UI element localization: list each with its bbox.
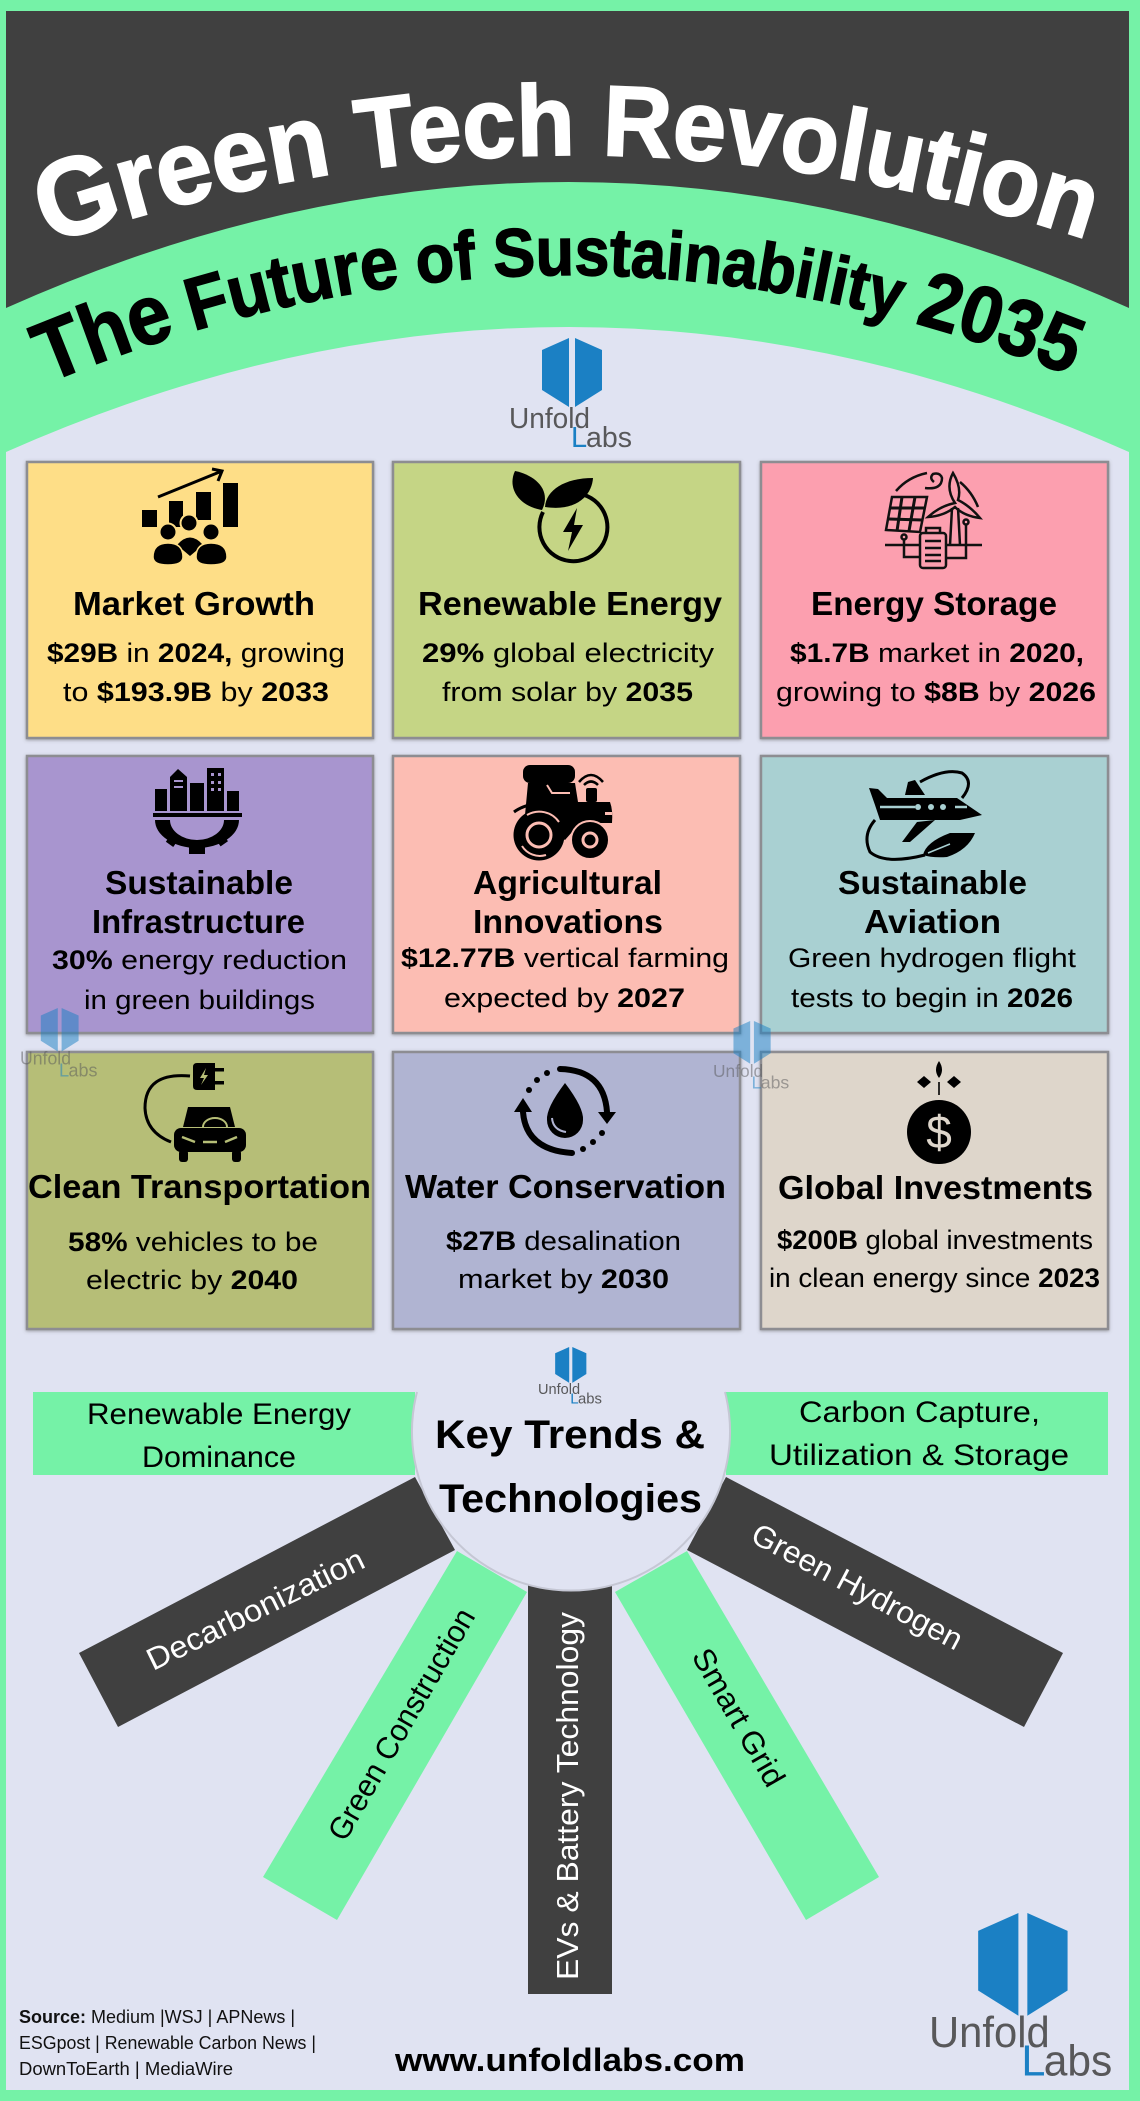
logo: top: Unfold: [509, 403, 590, 435]
source list: Source: Medium |WSJ | APNews |: [19, 2007, 295, 2027]
source list: [19, 2007, 316, 2079]
panel: sustainable aviation: [761, 756, 1108, 1033]
text: market growth stats: [47, 638, 345, 707]
logo: top: abs: [586, 422, 632, 454]
heading: energy storage: Energy Storage: [811, 585, 1057, 622]
bar: renewable energy dominance: Renewable Energy: [87, 1398, 351, 1431]
text: water stats: [446, 1226, 681, 1294]
text: market growth stats: to $193.9B by 2033: [63, 677, 329, 707]
text: water stats: market by 2030: [458, 1264, 669, 1294]
source list: ESGpost | Renewable Carbon News |: [19, 2033, 316, 2053]
icon: solar, wind and battery: [885, 473, 982, 568]
heading: sustainable infrastructure: Sustainable: [105, 864, 293, 901]
bar: carbon capture: Utilization & Storage: [769, 1439, 1069, 1472]
icon: leaf with bolt: [512, 471, 607, 561]
heading: renewable energy: Renewable Energy: [418, 585, 723, 622]
header banner: [6, 11, 1129, 308]
spoke: decarbonization: [79, 1477, 455, 1727]
spoke: decarbonization: Decarbonization: [141, 1542, 370, 1677]
text: transportation stats: 58% vehicles to be: [68, 1227, 318, 1257]
panel: agricultural innovations: [393, 756, 740, 1033]
bar: renewable energy dominance: Dominance: [142, 1441, 296, 1474]
panel: energy storage: [761, 462, 1108, 738]
heading: sustainable infrastructure: [92, 864, 305, 940]
logo: hub: abs: [578, 1391, 602, 1408]
icon: coin and plant: $: [926, 1106, 952, 1158]
text: market growth stats: $29B in 2024, growing: [47, 638, 345, 668]
spoke: green hydrogen: Green Hydrogen: [746, 1516, 969, 1657]
subtitle: The Future of Sustainability 2035: [26, 228, 1086, 378]
icon: plane and leaf: [867, 772, 982, 859]
text: agriculture stats: [401, 943, 729, 1013]
logo: watermark middle: [713, 1021, 789, 1093]
text: aviation stats: [788, 943, 1077, 1013]
heading: agricultural innovations: [473, 864, 663, 940]
icon: coin and plant: [907, 1061, 971, 1164]
logo: hub: Unfold: [538, 1381, 580, 1398]
heading: water conservation: Water Conservation: [405, 1168, 726, 1205]
spoke: evs and battery technology: [528, 1570, 612, 1994]
panel: renewable energy: [393, 462, 740, 738]
text: investment stats: [769, 1225, 1100, 1293]
hub: key trends and technologies: [412, 1392, 730, 1591]
bar: carbon capture: [726, 1392, 1108, 1475]
logo: bottom right: L: [1021, 2037, 1045, 2085]
logo: bottom right: [929, 1913, 1112, 2085]
text: water stats: $27B desalination: [446, 1226, 681, 1256]
icon: water cycle: [514, 1069, 616, 1153]
hub: key trends and technologies: Technologies: [439, 1477, 702, 1521]
bar: carbon capture: Carbon Capture,: [799, 1396, 1040, 1429]
heading: agricultural innovations: Agricultural: [473, 864, 662, 901]
heading: clean transportation: Clean Transportation: [28, 1168, 371, 1205]
logo: watermark middle: L: [751, 1073, 761, 1093]
panel: clean transportation: [27, 1052, 373, 1329]
logo: bottom right: abs: [1044, 2037, 1112, 2085]
logo: watermark middle: Unfold: [713, 1061, 763, 1081]
website url: www.unfoldlabs.com: [394, 2042, 745, 2078]
logo: top: [509, 338, 632, 454]
icon: electric car: [145, 1063, 246, 1162]
logo: watermark left: [20, 1008, 97, 1081]
spoke: green hydrogen: [687, 1477, 1063, 1727]
panel: sustainable infrastructure: [27, 756, 373, 1033]
heading: market growth: Market Growth: [73, 585, 315, 622]
heading: global investments: Global Investments: [778, 1169, 1093, 1206]
text: renewable energy stats: [422, 638, 715, 707]
heading: sustainable aviation: Sustainable: [838, 864, 1027, 901]
logo: watermark left: Unfold: [20, 1048, 71, 1069]
text: renewable energy stats: from solar by 2035: [442, 677, 693, 707]
icon: market growth: [142, 469, 238, 565]
text: infrastructure stats: 30% energy reduction: [52, 945, 347, 975]
heading: sustainable aviation: [838, 864, 1027, 940]
spoke: green construction: Green Construction: [321, 1602, 482, 1846]
logo: watermark left: L: [59, 1060, 69, 1081]
spoke: smart grid: [615, 1551, 879, 1920]
bar: renewable energy dominance: [33, 1392, 415, 1475]
text: renewable energy stats: 29% global electricity: [422, 638, 715, 668]
icon: city on gear: [153, 768, 242, 854]
text: aviation stats: Green hydrogen flight: [788, 943, 1077, 973]
logo: top: L: [571, 422, 587, 454]
text: transportation stats: electric by 2040: [86, 1265, 298, 1295]
text: infrastructure stats: in green buildings: [84, 985, 315, 1015]
title: Green Tech Revolution: [37, 82, 1094, 239]
logo: watermark left: abs: [69, 1060, 97, 1081]
text: infrastructure stats: [52, 945, 347, 1015]
source list: DownToEarth | MediaWire: [19, 2059, 233, 2079]
text: investment stats: $200B global investments: [777, 1225, 1093, 1255]
text: investment stats: in clean energy since 2023: [769, 1263, 1100, 1293]
heading: agricultural innovations: Innovations: [473, 903, 663, 940]
spoke: green construction: [263, 1551, 527, 1920]
text: transportation stats: [68, 1227, 318, 1295]
text: energy storage stats: [776, 638, 1096, 707]
heading: sustainable infrastructure: Infrastructure: [92, 903, 305, 940]
logo: watermark middle: abs: [761, 1073, 789, 1093]
text: agriculture stats: $12.77B vertical farming: [401, 943, 729, 973]
icon: smart tractor: [514, 765, 612, 860]
panel: market growth: [27, 462, 373, 738]
logo: bottom right: Unfold: [929, 2009, 1050, 2057]
heading: sustainable aviation: Aviation: [864, 903, 1001, 940]
text: agriculture stats: expected by 2027: [444, 983, 685, 1013]
logo: hub: [538, 1347, 602, 1408]
spoke: smart grid: Smart Grid: [685, 1642, 792, 1793]
spoke: evs and battery technology: EVs & Battery Technology: [550, 1611, 585, 1980]
text: energy storage stats: growing to $8B by 2026: [776, 677, 1096, 707]
logo: hub: L: [570, 1391, 579, 1408]
text: aviation stats: tests to begin in 2026: [791, 983, 1073, 1013]
text: energy storage stats: $1.7B market in 2020,: [790, 638, 1084, 668]
hub: key trends and technologies: Key Trends &: [435, 1413, 705, 1457]
panel: global investments: [761, 1052, 1108, 1329]
panel: water conservation: [393, 1052, 740, 1329]
